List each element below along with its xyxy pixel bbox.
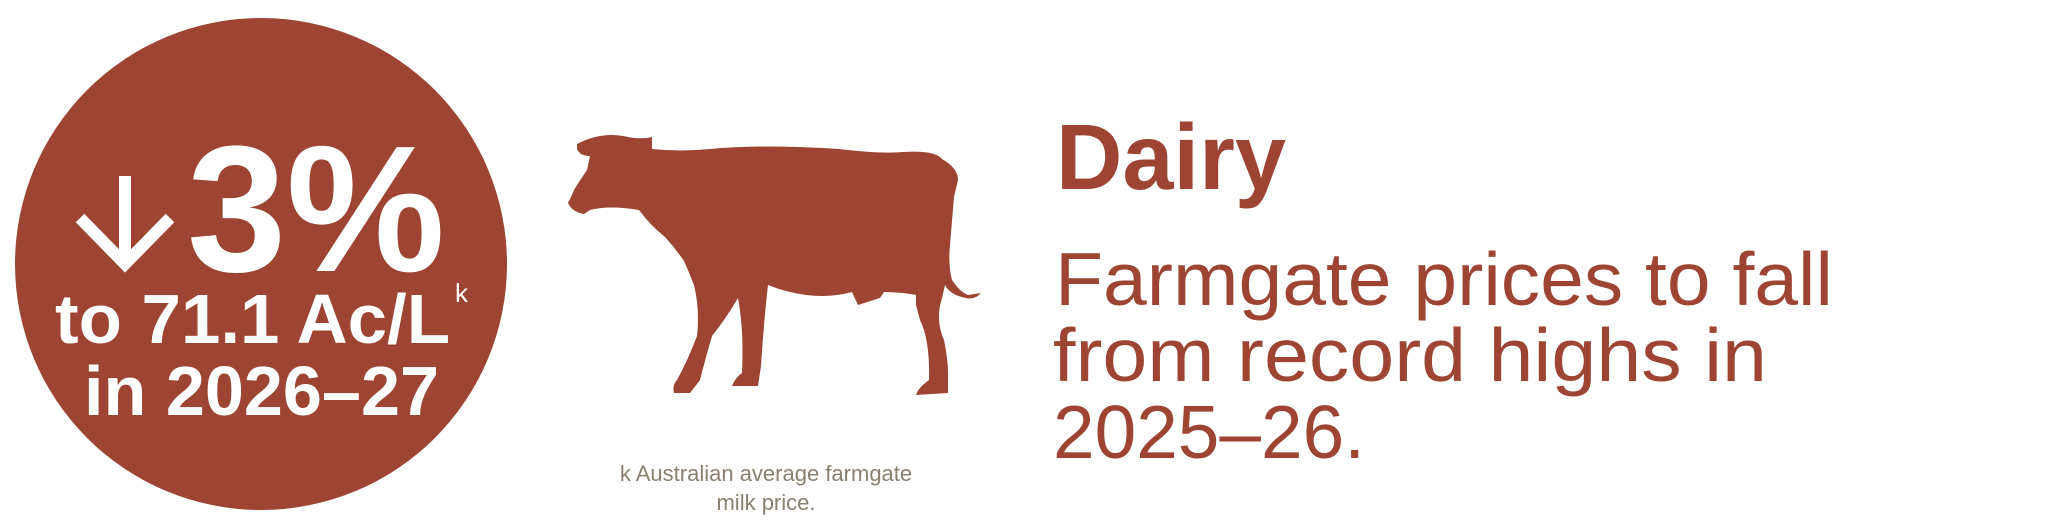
big number: 3% xyxy=(187,109,445,310)
year text: in 2026–27 xyxy=(84,352,439,430)
icon: down arrow xyxy=(80,176,170,266)
body text: Farmgate prices to fall xyxy=(1055,237,1833,321)
body text: 2025–26. xyxy=(1053,390,1365,474)
footnote xyxy=(620,461,912,515)
superscript k: k xyxy=(455,278,469,308)
body text xyxy=(1053,237,1833,474)
value text: to 71.1 Ac/L xyxy=(55,280,450,358)
heading: Dairy: Dairy xyxy=(1056,105,1286,209)
circle badge xyxy=(15,18,507,510)
footnote: milk price. xyxy=(716,490,816,515)
icon: cow silhouette xyxy=(568,135,981,395)
body text: from record highs in xyxy=(1053,313,1767,397)
footnote: k Australian average farmgate xyxy=(620,461,912,486)
